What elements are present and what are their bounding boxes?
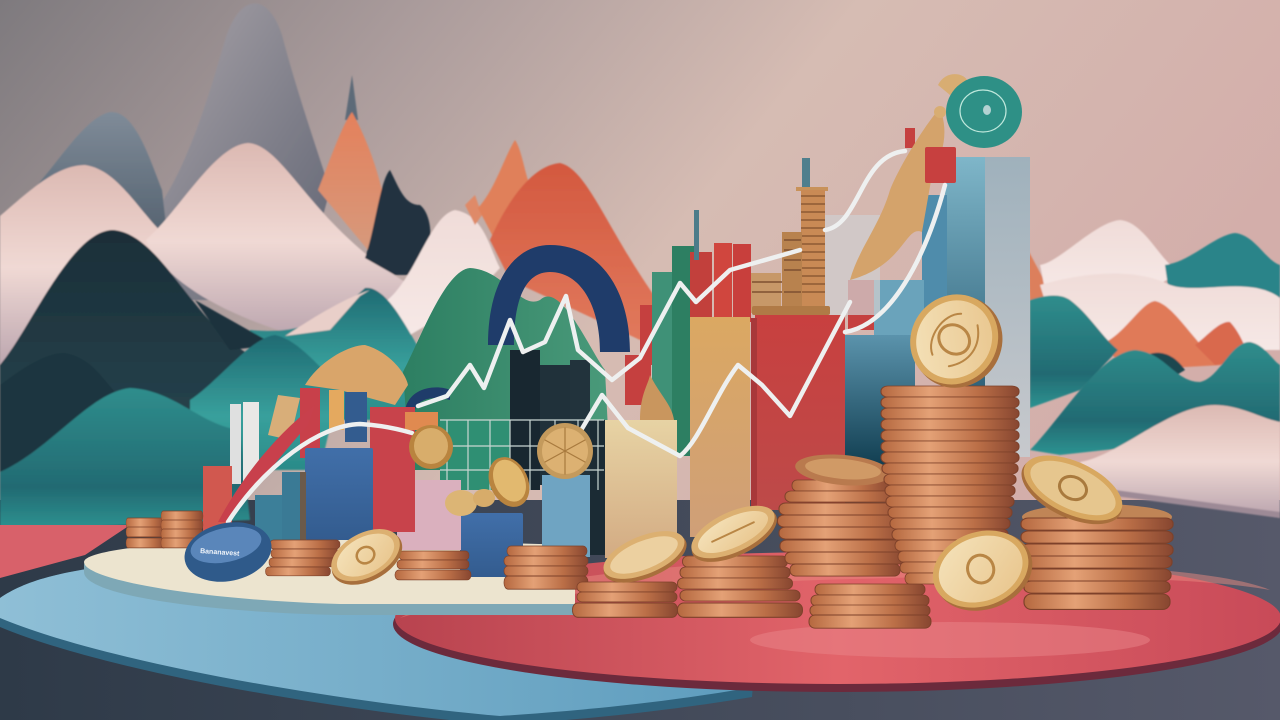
teal gauge medallion xyxy=(946,76,1022,148)
coin stack: tall centre xyxy=(778,451,912,576)
coin: left row xyxy=(322,518,411,596)
coin: right stack top xyxy=(1011,442,1133,538)
coin: bronze fan xyxy=(537,423,593,479)
wooden shapes xyxy=(640,74,968,420)
coin: upper right xyxy=(892,276,1020,405)
background sky xyxy=(0,0,1280,560)
platform: cream disc xyxy=(84,538,575,615)
platform: left red strip xyxy=(0,525,130,578)
gold coins xyxy=(322,276,1133,624)
coin stack: tall right xyxy=(881,386,1019,584)
bar chart: dark bars and grid xyxy=(440,350,606,555)
coin: lower right xyxy=(922,517,1044,624)
coin: tilted gold xyxy=(481,450,537,514)
bar chart: centre columns xyxy=(397,315,845,577)
pebble label: Bananavest xyxy=(200,548,240,558)
mountains: right range xyxy=(1028,220,1280,518)
platform: red disc xyxy=(393,552,1280,692)
platform: blue disc xyxy=(0,558,760,720)
mountains: green hills and navy arch xyxy=(403,245,630,470)
coin: centre leaning xyxy=(683,494,785,573)
pebble badge xyxy=(179,514,277,590)
coin stack: far right xyxy=(1021,504,1173,609)
coin tower xyxy=(751,187,830,315)
coin stack: left row xyxy=(266,540,588,589)
coin: flying on arc xyxy=(409,425,453,469)
coin stack: small left pair xyxy=(126,511,203,548)
bar chart: left columns xyxy=(203,345,438,545)
coin stack: centre low xyxy=(572,556,931,628)
coin: small pair xyxy=(445,489,495,516)
bar chart: right blue tower xyxy=(822,128,1030,465)
floor xyxy=(0,500,1280,720)
red cube on tower xyxy=(925,147,956,183)
line chart: trend lines xyxy=(228,151,945,522)
coin: centre low xyxy=(596,521,693,593)
bar chart: background green and red bars xyxy=(625,158,810,456)
mountains: left range xyxy=(0,3,672,530)
